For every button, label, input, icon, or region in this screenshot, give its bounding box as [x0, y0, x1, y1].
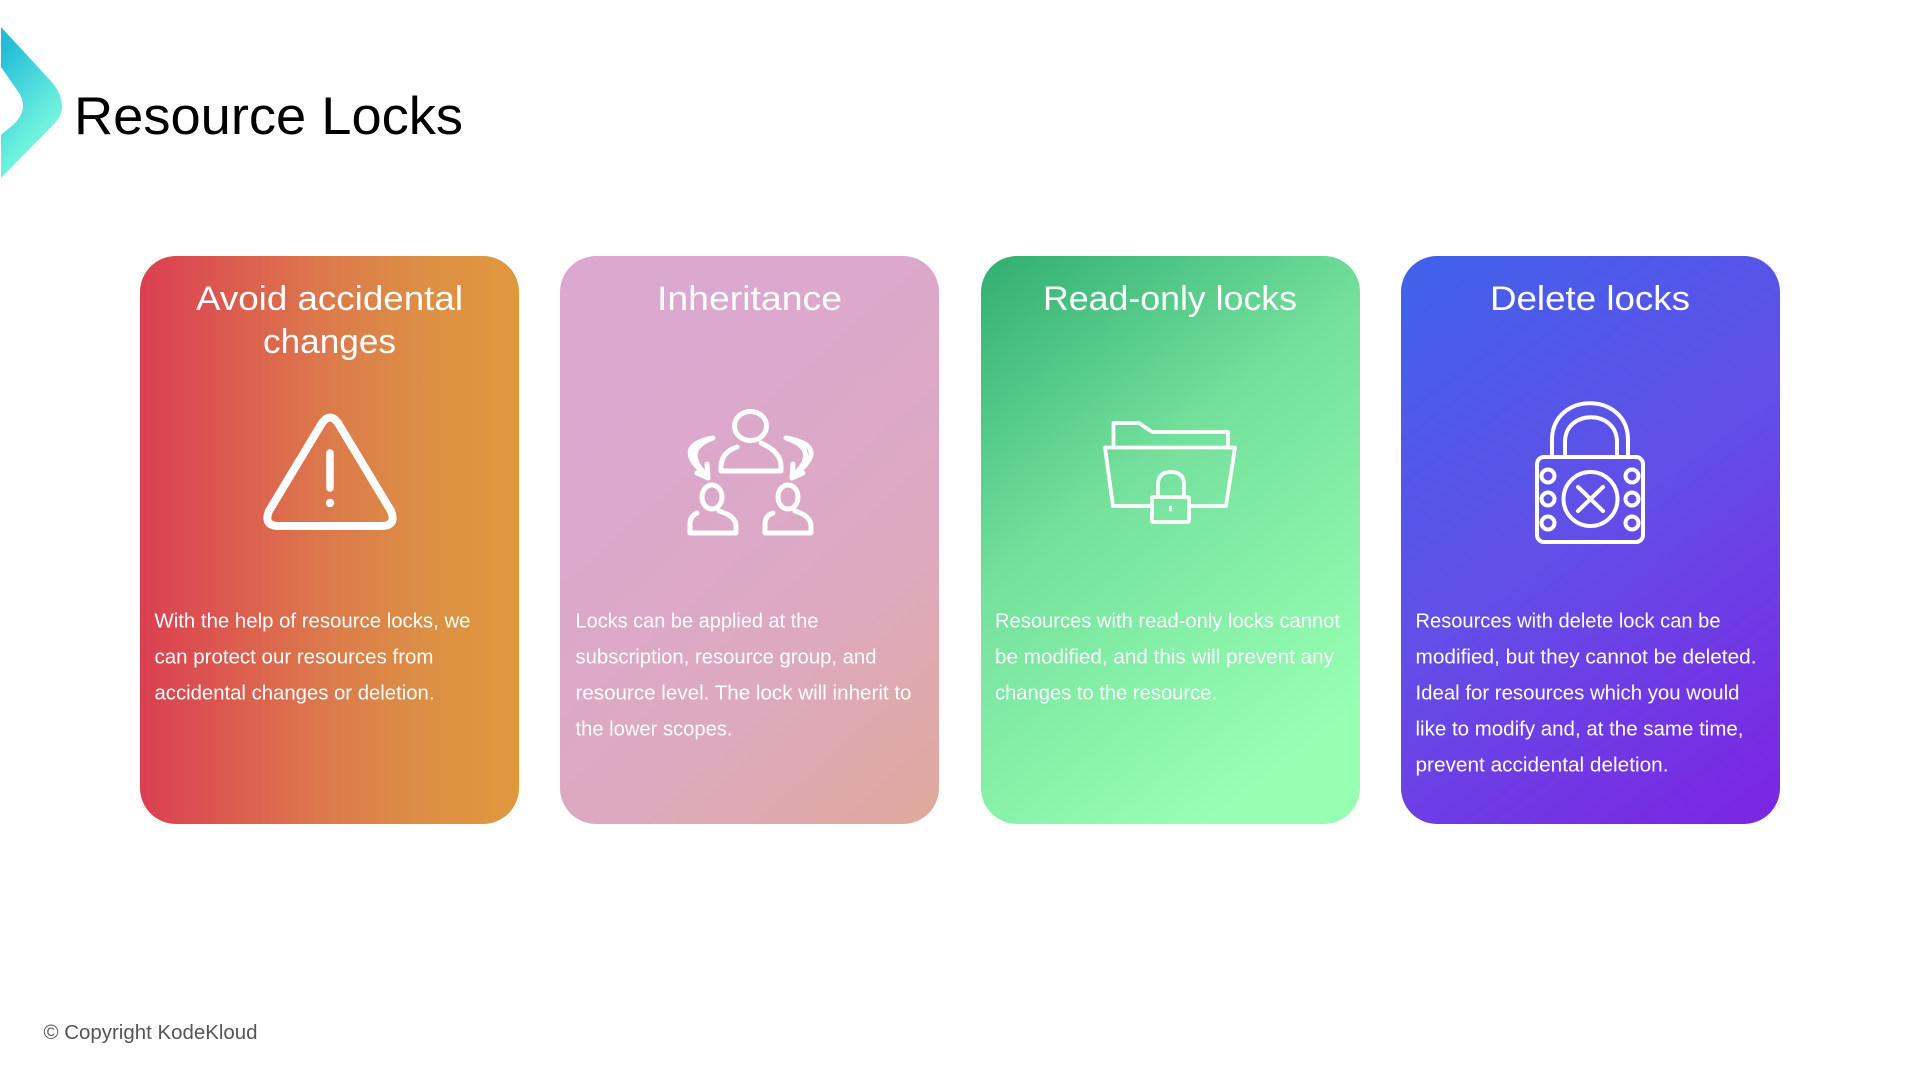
- body text: accidental changes or deletion.: [154, 682, 435, 704]
- logo chevron: [1, 27, 62, 178]
- body text: [1416, 610, 1756, 776]
- body text: like to modify and, at the same time,: [1416, 718, 1744, 740]
- footer copyright: © Copyright KodeKloud: [44, 1022, 258, 1044]
- panel: avoid accidental changes: [140, 256, 519, 824]
- body text: Resources with read-only locks cannot: [995, 610, 1340, 632]
- card background: [1401, 256, 1780, 824]
- heading: Inheritance: [657, 280, 842, 318]
- body text: Ideal for resources which you would: [1416, 682, 1740, 704]
- panel: inheritance: [560, 256, 939, 824]
- heading: changes: [263, 323, 396, 361]
- body text: modified, but they cannot be deleted.: [1416, 646, 1756, 668]
- icon: padlock with cross: [1537, 403, 1643, 542]
- body text: Resources with delete lock can be: [1416, 610, 1720, 632]
- body text: subscription, resource group, and: [576, 646, 876, 668]
- body text: With the help of resource locks, we: [154, 610, 470, 632]
- body text: resource level. The lock will inherit to: [576, 682, 912, 704]
- icon: users with arrows: [690, 412, 811, 533]
- heading: Delete locks: [1490, 280, 1690, 318]
- body text: [576, 610, 912, 740]
- panel: delete locks: [1401, 256, 1780, 824]
- card background: [560, 256, 939, 824]
- body text: the lower scopes.: [576, 718, 732, 740]
- body text: Locks can be applied at the: [576, 610, 818, 632]
- heading: [196, 280, 463, 361]
- title: Resource Locks: [74, 87, 463, 146]
- card background: [140, 256, 519, 824]
- heading: Avoid accidental: [196, 280, 463, 318]
- icon: warning triangle: [267, 418, 393, 526]
- card background: [981, 256, 1360, 824]
- body text: [154, 610, 470, 704]
- heading: Read-only locks: [1043, 280, 1297, 318]
- body text: [995, 610, 1340, 704]
- body text: changes to the resource.: [995, 682, 1217, 704]
- body text: be modified, and this will prevent any: [995, 646, 1334, 668]
- body text: prevent accidental deletion.: [1416, 754, 1668, 776]
- icon: folder with lock: [1105, 423, 1235, 522]
- panel: read-only locks: [981, 256, 1360, 824]
- body text: can protect our resources from: [154, 646, 434, 668]
